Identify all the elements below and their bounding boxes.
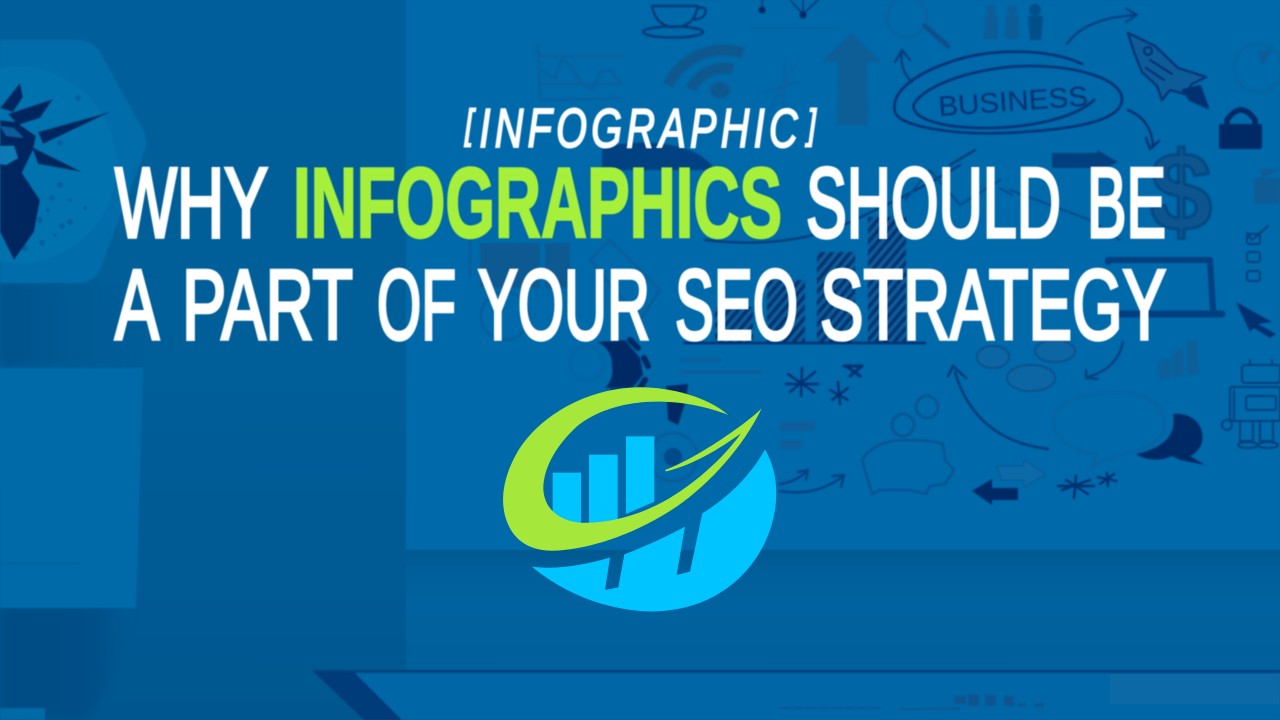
icon: faint bar chart [1158, 340, 1199, 380]
title line 2 [115, 249, 1166, 360]
icon: briefcase [1254, 170, 1280, 204]
icon: laptop [1108, 260, 1222, 314]
icon: small bars near logo [780, 421, 815, 449]
arrow: to dollar [1128, 110, 1159, 149]
icon: pendant dots [750, 0, 840, 28]
icon: gear outline and dark piece near logo [649, 384, 697, 481]
doodle: business ellipses [894, 52, 1122, 133]
chart: hatched bars [684, 217, 925, 343]
subtitle: [ [464, 101, 476, 147]
icon: double arrows [972, 460, 1045, 505]
subtitle: INFOGRAPHIC [479, 99, 798, 160]
icon: up arrow [822, 33, 881, 125]
logo: green swoosh [503, 387, 762, 551]
logo [503, 387, 776, 611]
title [115, 147, 1166, 360]
icon: large speech bubble [1053, 392, 1164, 467]
whiteboard shadow [406, 550, 1280, 576]
arrow: long curve [948, 366, 1048, 449]
icon: dark gear [570, 340, 648, 392]
shadow below left box [0, 606, 132, 720]
arrow: to magnifier [895, 50, 912, 82]
icon: piggy bank [862, 396, 954, 494]
arrows: squiggles by the logo [780, 470, 844, 492]
doodle: chart line in centre [905, 170, 1120, 240]
icon: cursor arrow [1236, 302, 1276, 338]
doodle: dark hatched oval [602, 143, 714, 170]
icon: dollar sign: $ [1150, 129, 1212, 254]
chart: bars on screen [780, 694, 1044, 709]
monitor [312, 670, 1280, 720]
icon: plant pot [0, 40, 146, 283]
icon: speech bubbles small [977, 340, 1075, 391]
panel: screen widget [1110, 674, 1280, 704]
icon: rocket [1128, 33, 1208, 108]
icon: plant leaves [0, 83, 110, 260]
icon: wifi [668, 50, 743, 89]
icon: coffee cup [643, 6, 706, 38]
icon: lock [1219, 110, 1262, 149]
logo: blue globe segment [532, 449, 776, 611]
icon: asterisks [786, 366, 1116, 498]
icon: checklist [1247, 226, 1268, 281]
text: business: BUSINESS [937, 81, 1089, 122]
title line 1: BE [1087, 147, 1166, 258]
chart: line doodle [538, 44, 622, 100]
title line 2: PART [182, 249, 353, 360]
panel: whiteboard [406, 0, 1280, 550]
title line 2: SEO [675, 249, 798, 360]
doodle: crossed axes [765, 60, 800, 125]
title line 1: INFOGRAPHICS [293, 147, 782, 258]
icon: dark speech bubble [1136, 414, 1205, 465]
title line 2: OF [377, 249, 456, 360]
arrow: curved small [1086, 342, 1123, 379]
doodle: trend curve [705, 150, 975, 243]
panel: lower desk band [406, 550, 1280, 720]
icon: robot [1222, 360, 1280, 448]
icon: magnifier [887, 0, 948, 46]
doodle: small notes [682, 360, 760, 372]
title line 2: A [115, 249, 159, 360]
panel: left white box [0, 368, 143, 720]
icon: people [984, 4, 1043, 40]
title line 2: YOUR [478, 249, 650, 360]
doodle: diagram behind title [470, 240, 660, 340]
shade above left box [0, 283, 170, 368]
monitor side bezel [314, 672, 402, 720]
doodles on whiteboard [312, 0, 1280, 720]
subtitle: ] [805, 101, 817, 147]
title line 1: WHY [115, 147, 268, 258]
logo: chart bars [553, 436, 654, 524]
icon: right arrow dark [1052, 150, 1118, 172]
arrow: to rocket [1067, 9, 1137, 44]
monitor top edge [312, 670, 1280, 673]
panel: monitor screen [352, 672, 1280, 720]
icon: pie chart [1234, 44, 1280, 92]
title line 1: SHOULD [806, 147, 1061, 258]
